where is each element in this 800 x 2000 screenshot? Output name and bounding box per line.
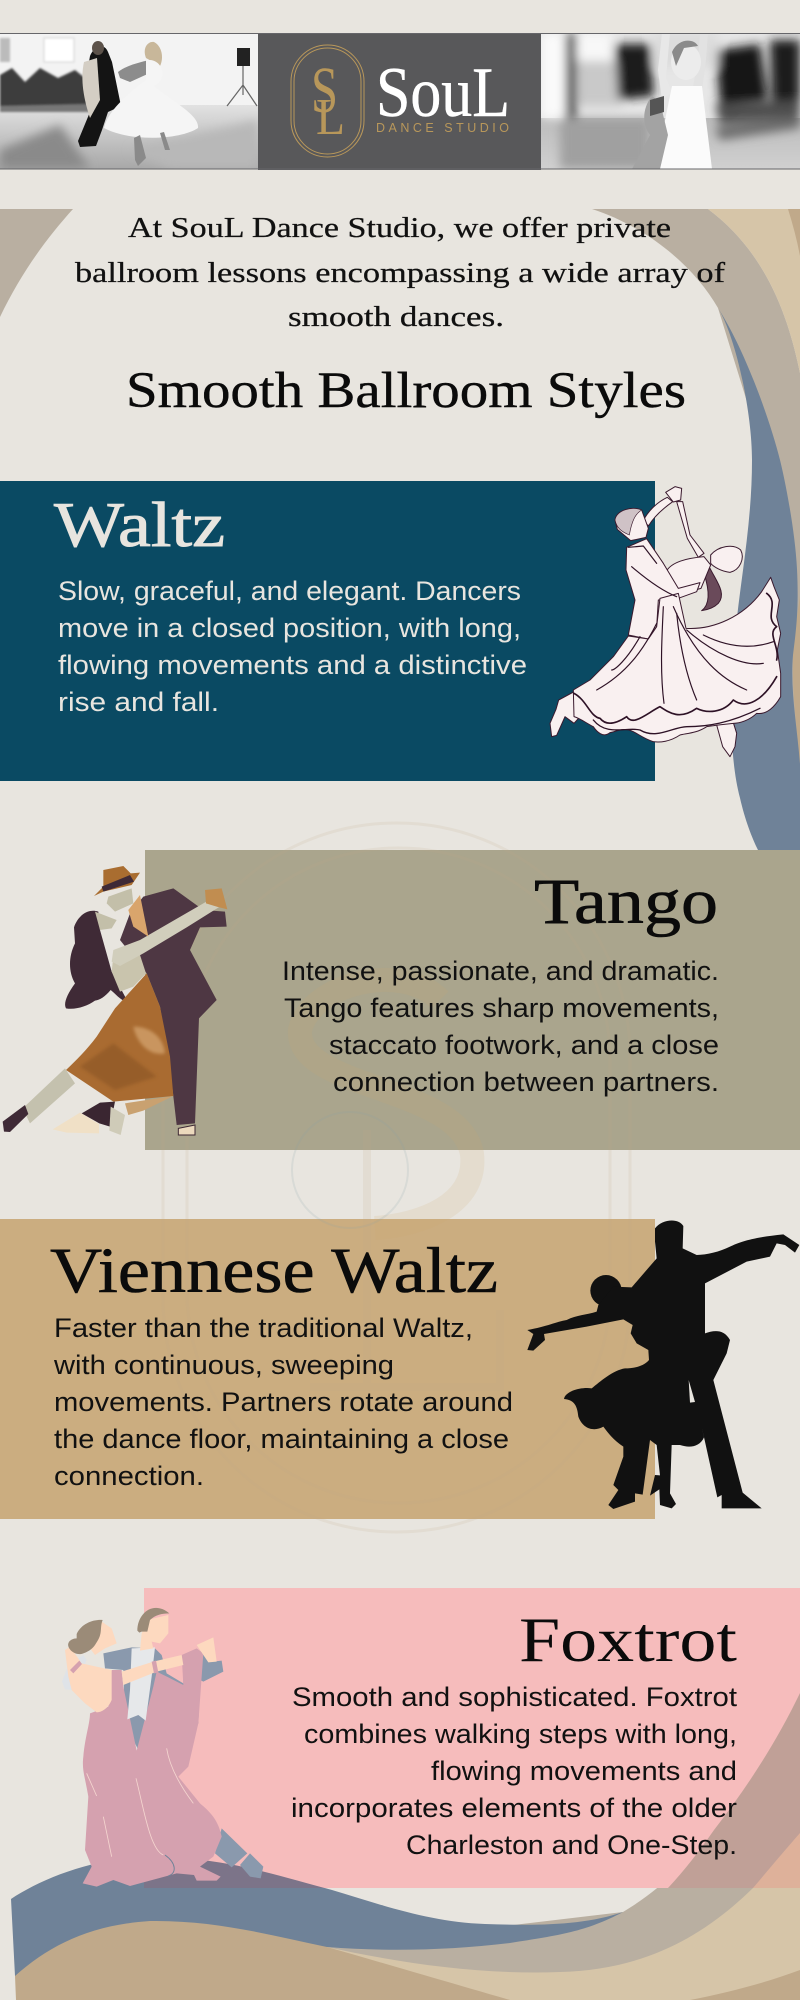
shirt and head: [128, 895, 148, 937]
man head: [615, 508, 648, 541]
intro paragraph: [75, 212, 725, 333]
swoosh: top left: [0, 209, 73, 317]
tango title: Tango: [534, 866, 718, 938]
foxtrot title: Foxtrot: [519, 1604, 737, 1675]
woman back: [65, 1647, 112, 1712]
waltz description: Slow, graceful, and elegant. Dancers: [58, 576, 521, 606]
skirt: [573, 577, 781, 742]
man suit: [103, 1647, 223, 1753]
man back leg and foot: [550, 691, 581, 737]
logo oval emblem: S: [311, 54, 338, 127]
waltz description: [58, 576, 527, 717]
man raised arm and hands: [643, 487, 682, 526]
logo oval emblem: L: [316, 89, 345, 146]
swoosh: bottom layered waves: [11, 1693, 800, 2000]
tango description: [282, 956, 719, 1097]
viennese waltz title: Viennese Waltz: [50, 1235, 498, 1307]
photo: ballroom couple: [0, 33, 258, 169]
tango description: Intense, passionate, and dramatic.: [282, 956, 719, 986]
woman torso: [666, 557, 711, 594]
viennese waltz description: the dance floor, maintaining a close: [54, 1424, 509, 1454]
skirt folds and ruffles: [574, 546, 777, 734]
banner rules: [0, 34, 800, 169]
left hand: [62, 1655, 87, 1690]
swoosh: top right layered waves: [592, 209, 800, 850]
panel: foxtrot: [144, 1588, 800, 1888]
man head: [140, 1615, 168, 1651]
woman raised arm: [677, 502, 704, 557]
logo tagline: DANCE STUDIO: [376, 121, 509, 135]
panel: tango: [145, 850, 800, 1150]
woman hair: [65, 911, 129, 1009]
man trouser leg and shoe: [215, 1828, 247, 1867]
waltz title: Waltz: [54, 490, 225, 560]
intro paragraph: smooth dances.: [288, 301, 504, 333]
viennese waltz description: with continuous, sweeping: [53, 1350, 394, 1380]
woman head: [90, 1622, 117, 1655]
waltz description: move in a closed position, with long,: [58, 613, 521, 643]
tango description: connection between partners.: [333, 1067, 719, 1097]
woman head: [711, 546, 742, 572]
panel: waltz: [0, 481, 655, 781]
illustration: foxtrot couple: [62, 1608, 263, 1887]
foxtrot description: flowing movements and: [431, 1756, 737, 1786]
viennese waltz description: Faster than the traditional Waltz,: [54, 1313, 473, 1343]
skirt: [66, 973, 173, 1102]
main heading: Smooth Ballroom Styles: [126, 363, 686, 419]
intro paragraph: At SouL Dance Studio, we offer private: [128, 212, 671, 244]
tango description: staccato footwork, and a close: [329, 1030, 719, 1060]
woman arm and hand: [122, 1655, 183, 1685]
intro paragraph: ballroom lessons encompassing a wide array of: [75, 257, 725, 289]
logo wordmark: SouL: [376, 54, 510, 132]
foxtrot description: Smooth and sophisticated. Foxtrot: [292, 1682, 738, 1712]
watermark logo: [163, 823, 630, 1532]
foxtrot description: [291, 1682, 738, 1860]
photo: young dancer: [541, 33, 800, 169]
viennese waltz description: connection.: [54, 1461, 204, 1491]
foxtrot description: incorporates elements of the older: [291, 1793, 737, 1823]
foxtrot description: Charleston and One-Step.: [406, 1830, 737, 1860]
woman foot: [717, 723, 737, 757]
man torso: [626, 539, 700, 639]
foxtrot description: combines walking steps with long,: [304, 1719, 737, 1749]
waltz description: rise and fall.: [58, 687, 219, 717]
dress: [83, 1648, 222, 1887]
header photo banner: [0, 33, 800, 170]
shirt: [127, 1647, 155, 1721]
illustration: viennese waltz silhouette: [527, 1220, 799, 1509]
panel: viennese waltz: [0, 1219, 655, 1519]
man suit: [120, 888, 227, 1125]
torso and arm: [112, 955, 146, 992]
viennese waltz description: movements. Partners rotate around: [54, 1387, 513, 1417]
logo oval emblem: [291, 45, 364, 157]
logo panel: [258, 33, 541, 170]
illustration: tango couple: [3, 866, 227, 1135]
woman hair strand: [702, 568, 721, 611]
tango description: Tango features sharp movements,: [284, 993, 719, 1023]
illustration: waltz couple: [550, 487, 781, 757]
waltz description: flowing movements and a distinctive: [58, 650, 527, 680]
legs and shoes: [23, 1068, 75, 1123]
viennese waltz description: [53, 1313, 513, 1491]
